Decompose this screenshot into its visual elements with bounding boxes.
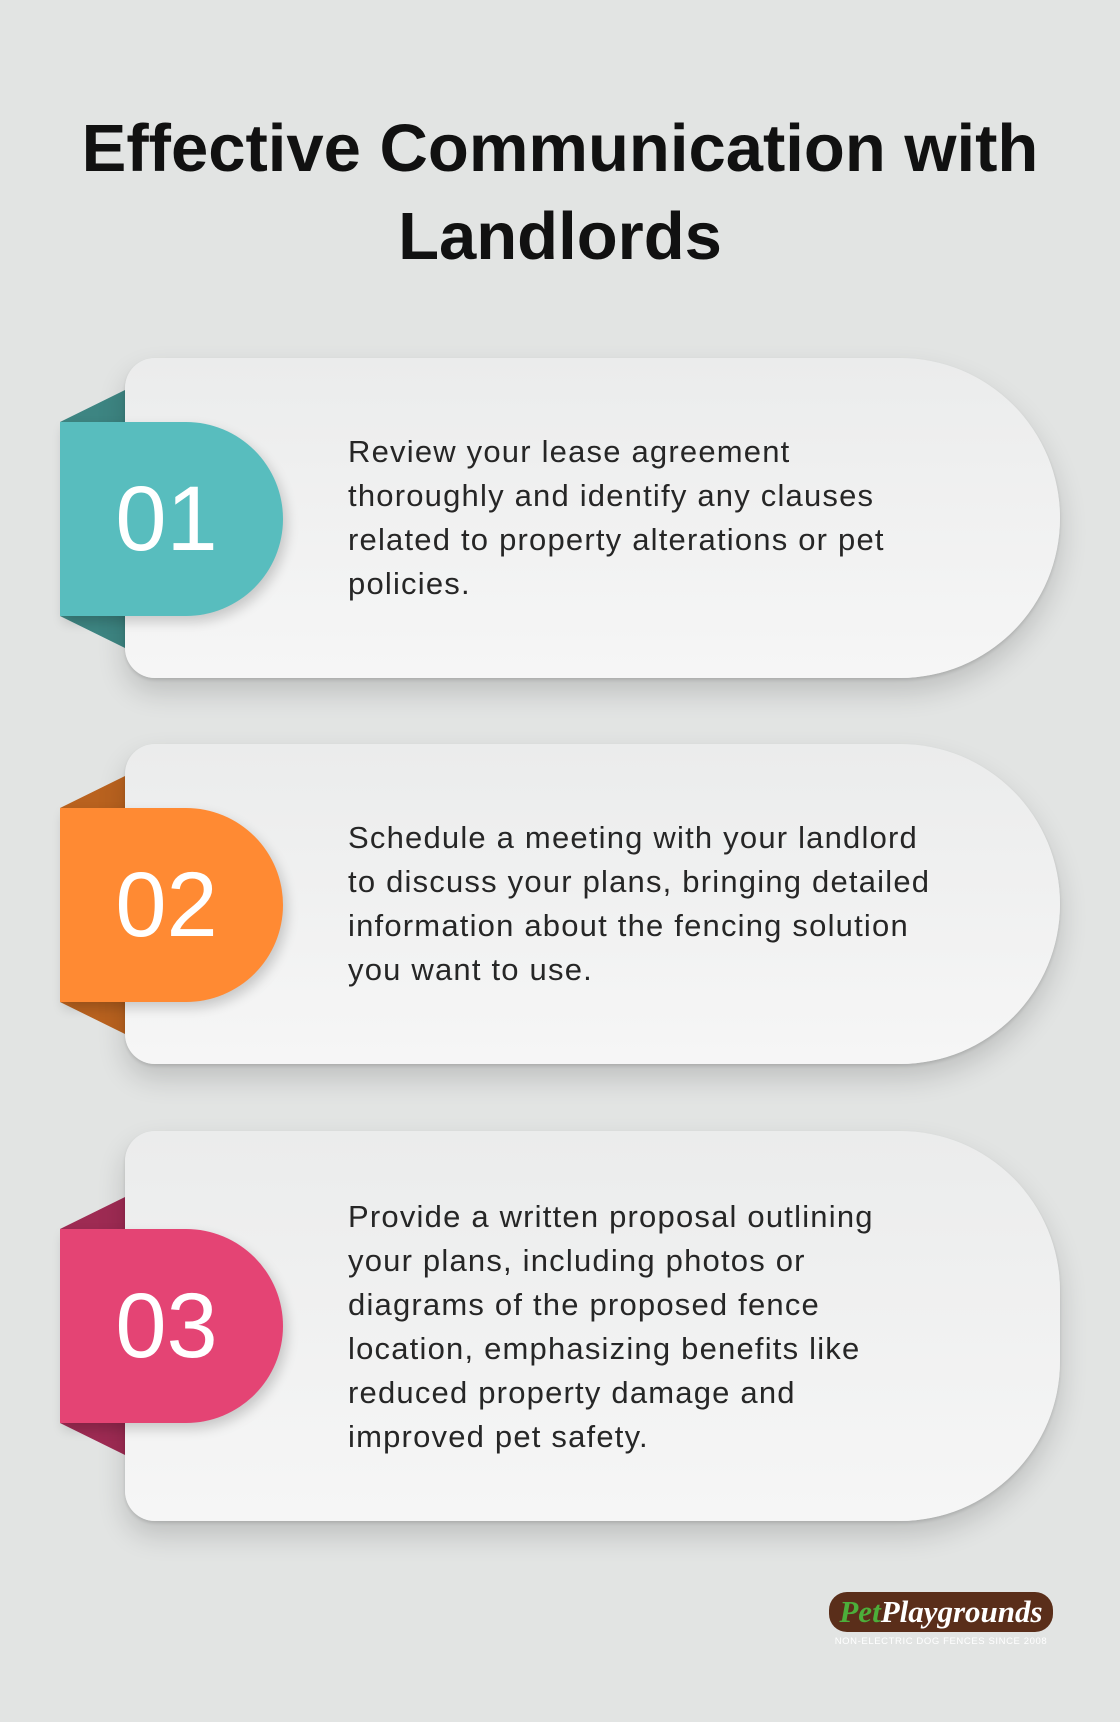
text 1: thoroughly and identify any clauses (348, 478, 874, 513)
text 2: Schedule a meeting with your landlord (348, 820, 918, 855)
text 3 (348, 1199, 874, 1454)
text 1: policies. (348, 566, 471, 601)
text 2: to discuss your plans, bringing detailed (348, 864, 930, 899)
text 2: you want to use. (348, 952, 593, 987)
card 2 (125, 744, 1060, 1064)
card 1 (125, 358, 1060, 678)
badge 02 (60, 808, 283, 1002)
text 2 (348, 820, 930, 987)
title: Effective Communication with (82, 111, 1038, 186)
text 3: your plans, including photos or (348, 1243, 806, 1278)
badge 01 (60, 422, 283, 616)
panel: step 2 (59, 744, 1070, 1089)
card 3 (125, 1131, 1060, 1521)
text 3: diagrams of the proposed fence (348, 1287, 820, 1322)
fold bottom 2 (60, 1002, 125, 1034)
title: Landlords (398, 199, 722, 274)
text 3: location, emphasizing benefits like (348, 1331, 860, 1366)
text 3: Provide a written proposal outlining (348, 1199, 874, 1234)
badge 03 (60, 1229, 283, 1423)
text 1: related to property alterations or pet (348, 522, 885, 557)
fold bottom 1 (60, 616, 125, 648)
fold bottom 3 (60, 1423, 125, 1455)
badge 02: 02 (115, 854, 218, 956)
text 3: reduced property damage and (348, 1375, 796, 1410)
text 1 (348, 434, 885, 601)
logo: PetPlaygrounds (839, 1594, 1043, 1629)
logo (829, 1592, 1053, 1647)
fold top 1 (60, 390, 125, 422)
badge 01: 01 (115, 468, 218, 570)
panel: step 3 (59, 1131, 1071, 1546)
panel: step 1 (59, 358, 1070, 703)
fold top 3 (60, 1197, 125, 1229)
text 2: information about the fencing solution (348, 908, 909, 943)
text 1: Review your lease agreement (348, 434, 790, 469)
text 3: improved pet safety. (348, 1419, 649, 1454)
logo: NON-ELECTRIC DOG FENCES SINCE 2008 (835, 1636, 1047, 1647)
title (82, 111, 1038, 274)
badge 03: 03 (115, 1275, 218, 1377)
fold top 2 (60, 776, 125, 808)
